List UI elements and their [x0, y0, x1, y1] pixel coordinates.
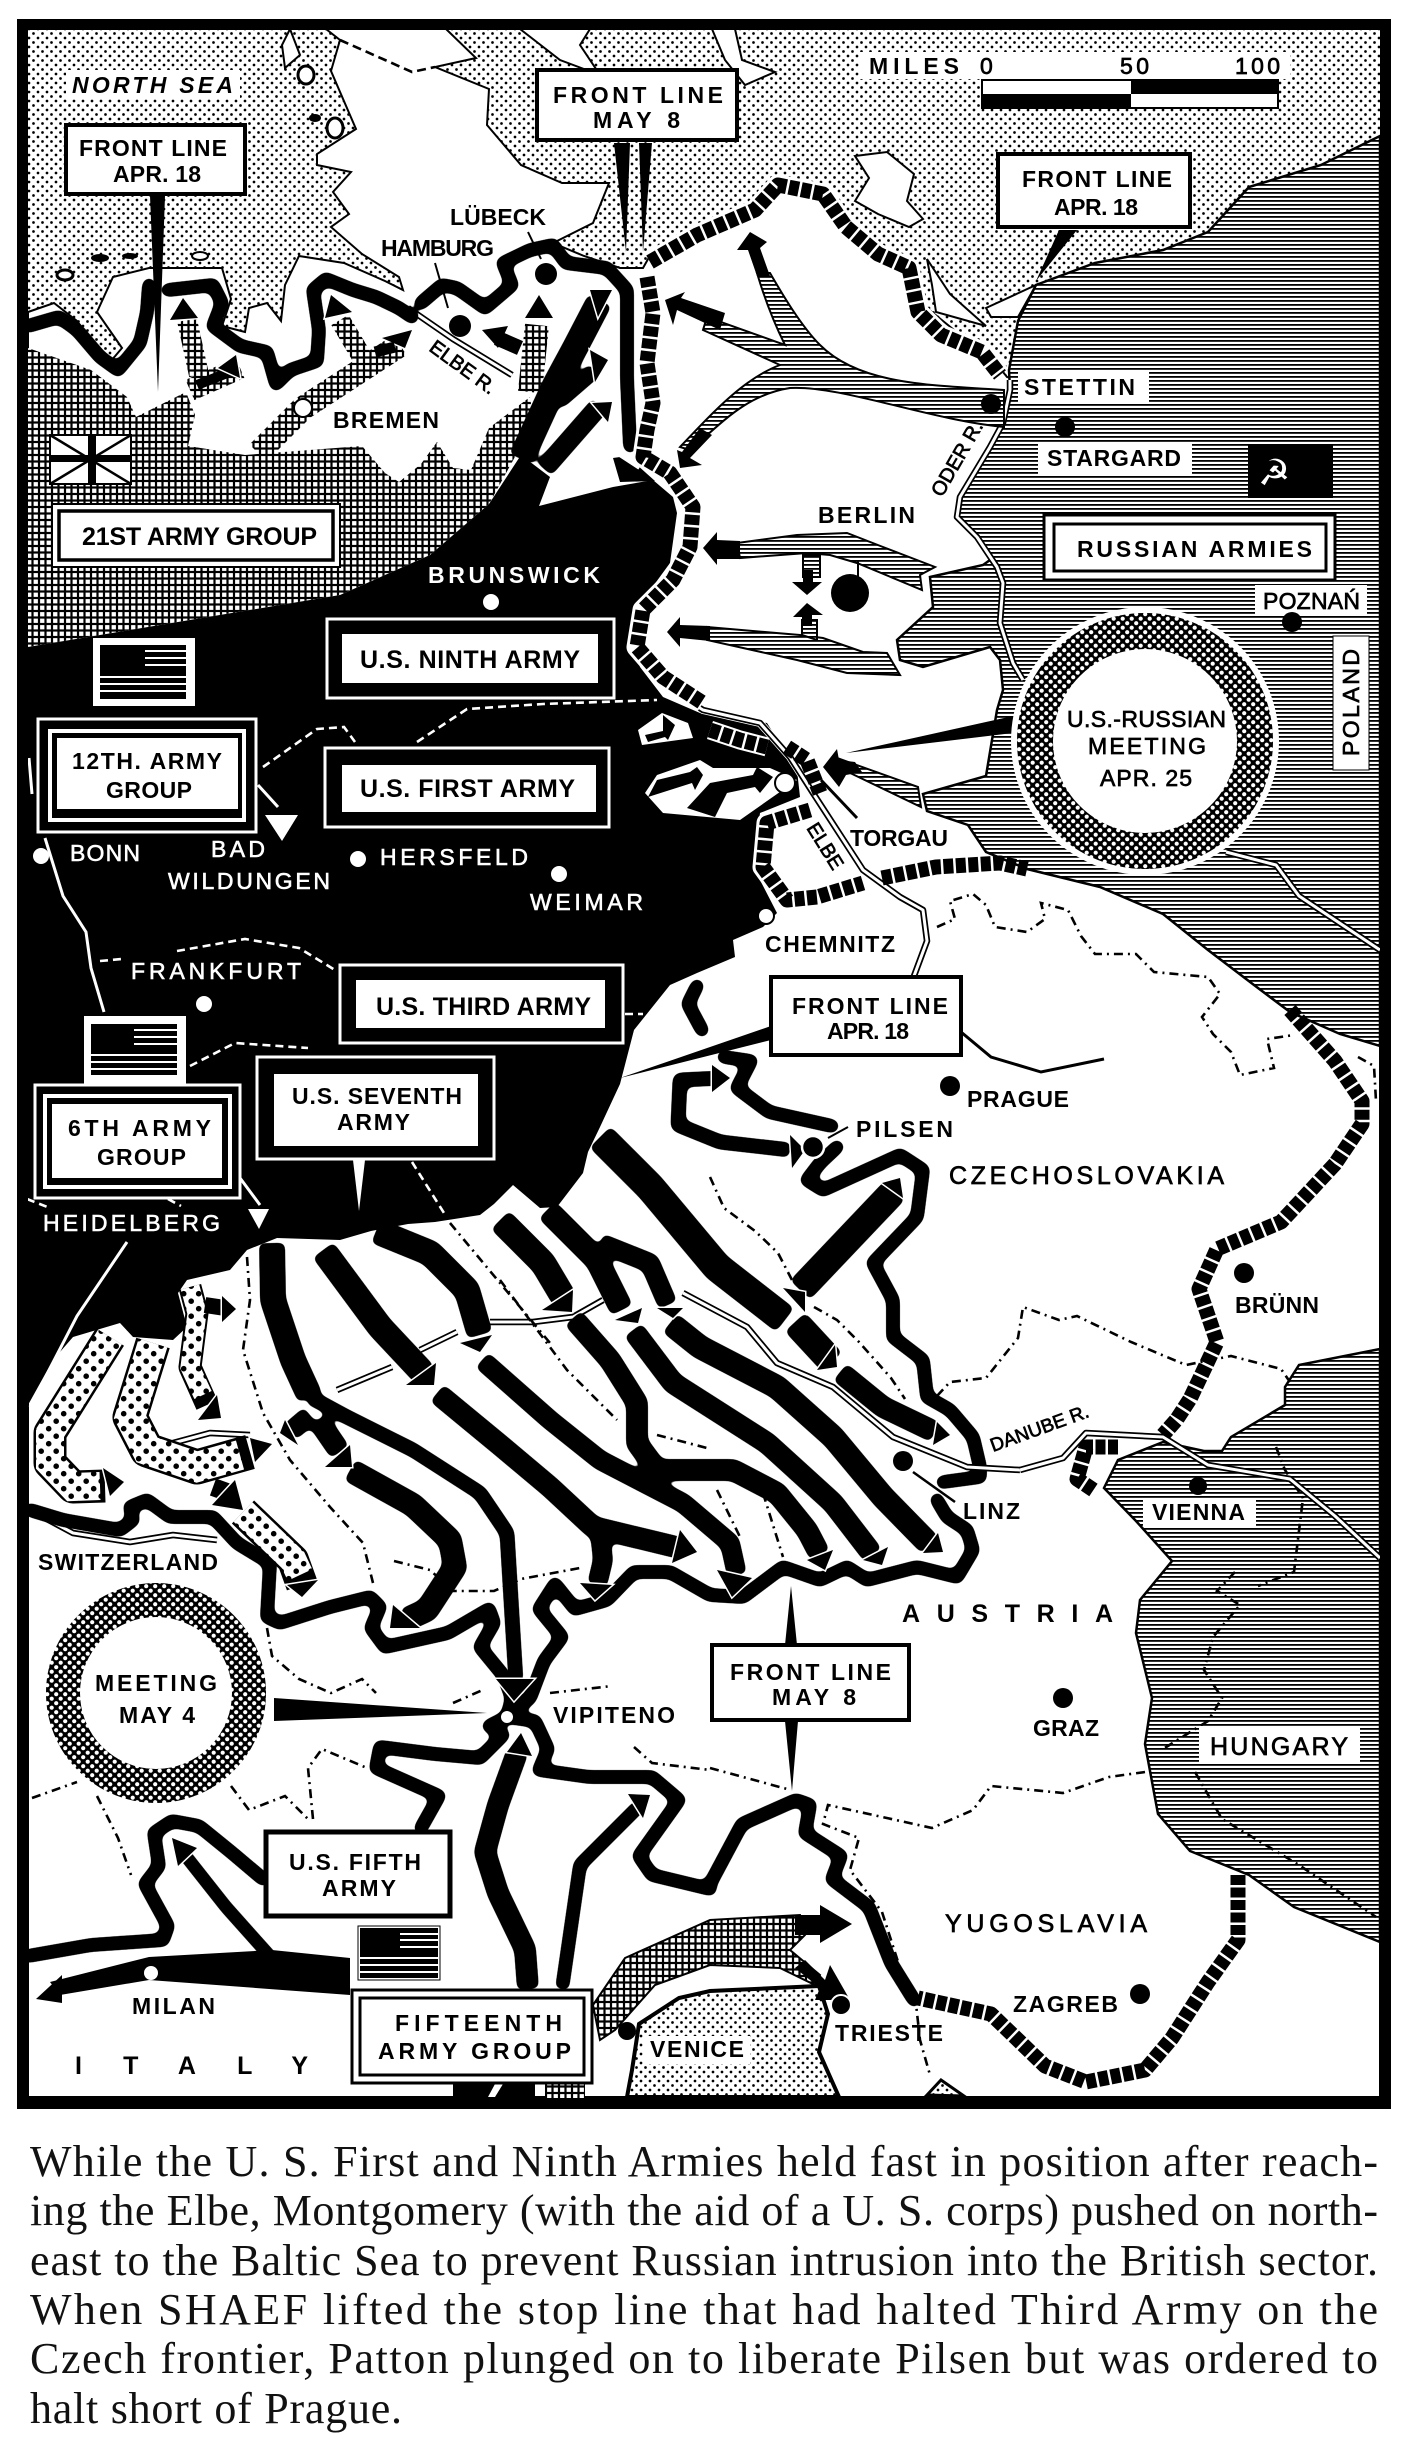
- box: U.S. Fifth Army: ARMY: [322, 1875, 396, 1901]
- callout: front line Apr 18, Baltic: FRONT LINE: [1022, 166, 1172, 192]
- arrows: Third and Seventh Army advances: [272, 1065, 950, 1701]
- label: North Sea: NORTH SEA: [72, 72, 233, 98]
- flag: Soviet Union: [1248, 445, 1333, 498]
- callout: front line Apr 18, central: FRONT LINE: [792, 993, 948, 1019]
- scale bar: miles: MILES: [869, 53, 959, 79]
- callout: front line May 8, south: FRONT LINE: [730, 1659, 891, 1685]
- labels: Austria, Graz, Hungary, Yugoslavia, Zagreb, Trieste: [831, 1600, 1360, 2046]
- labels: Austria, Graz, Hungary, Yugoslavia, Zagreb, Trieste: HUNGARY: [1210, 1733, 1348, 1761]
- callout: front line May 8, south: MAY 8: [772, 1684, 856, 1710]
- city labels: north Germany: LÜBECK: [450, 204, 546, 230]
- box: 6th Army Group: [35, 1085, 240, 1198]
- Russian dashed front line, Apr 18: [637, 185, 1362, 2082]
- box: U.S. Seventh Army: [257, 1057, 494, 1211]
- callout: front line May 8, north: MAY 8: [593, 107, 680, 133]
- box: 21st Army Group: 21ST ARMY GROUP: [82, 523, 317, 551]
- box: U.S. Fifth Army: [266, 1832, 450, 1916]
- label: Berlin: [818, 502, 915, 612]
- callout: front line May 8, north: FRONT LINE: [553, 82, 723, 108]
- flag: United States, Fifteenth Army Group: [358, 1926, 440, 1980]
- callout: front line Apr 18, west: [66, 125, 245, 392]
- label: Stargard: [1038, 417, 1192, 475]
- labels: Prague, Pilsen, Czechoslovakia, Brünn: CZECHOSLOVAKIA: [949, 1162, 1224, 1190]
- city labels: north Germany: [294, 204, 557, 433]
- label: Torgau and Elbe: ELBE: [802, 819, 848, 874]
- labels: Prague, Pilsen, Czechoslovakia, Brünn: PILSEN: [856, 1116, 953, 1142]
- label: Torgau and Elbe: TORGAU: [850, 825, 948, 851]
- city labels: central Germany in white: [33, 836, 643, 1236]
- caption text: east to the Baltic Sea to prevent Russian intrusion into the British sector.: [30, 2236, 1378, 2285]
- label: Stettin: [981, 372, 1149, 414]
- label: Venice: [618, 2022, 750, 2064]
- arrows: 6th Army Group stippled drives: [50, 1287, 318, 1597]
- bottom stub of arrows under Fifteenth Army Group: [453, 2083, 585, 2098]
- labels: Austria, Graz, Hungary, Yugoslavia, Zagreb, Trieste: ZAGREB: [1013, 1991, 1118, 2017]
- labels: Danube, Linz, Vienna: [893, 1402, 1380, 1558]
- label: Poznan: POZNAŃ: [1263, 588, 1360, 614]
- caption text: halt short of Prague.: [30, 2384, 402, 2433]
- scale bar: miles: 100: [1235, 53, 1280, 79]
- callout: front line May 8, north: [537, 70, 737, 252]
- callout: meeting May 4 circle: [63, 1600, 487, 1786]
- labels: Prague, Pilsen, Czechoslovakia, Brünn: BRÜNN: [1235, 1292, 1319, 1318]
- flag: Great Britain: [50, 435, 131, 484]
- callout: meeting May 4 circle: MAY 4: [119, 1702, 195, 1728]
- label: Berlin: BERLIN: [818, 502, 915, 528]
- labels: Austria, Graz, Hungary, Yugoslavia, Zagreb, Trieste: TRIESTE: [835, 2020, 943, 2046]
- scale bar: miles: 0: [980, 53, 993, 79]
- Russian zone hatching: [897, 136, 1380, 1942]
- callout: U.S.-Russian meeting circle: [1011, 607, 1279, 875]
- callout: front line Apr 18, west: APR. 18: [113, 161, 201, 187]
- label: Stargard: STARGARD: [1047, 445, 1181, 471]
- callout: front line May 8, south: [712, 1586, 909, 1791]
- box: Fifteenth Army Group: ARMY GROUP: [378, 2038, 571, 2064]
- scale bar: miles: 50: [1120, 53, 1149, 79]
- arrows: Russian advance through hatched bands: [665, 232, 1013, 818]
- labels: Prague, Pilsen, Czechoslovakia, Brünn: [802, 1076, 1319, 1318]
- box: Fifteenth Army Group: [352, 1990, 592, 2083]
- city labels: central Germany in white: BAD: [211, 836, 265, 862]
- box: U.S. Ninth Army: U.S. NINTH ARMY: [360, 646, 580, 674]
- box: 6th Army Group: 6TH ARMY: [68, 1115, 211, 1141]
- city labels: central Germany in white: HERSFELD: [380, 844, 528, 870]
- labels: Milan and Italy: ITALY: [75, 2052, 308, 2080]
- river overlays at the fronts: [683, 1293, 1020, 1470]
- American zone black mass: [28, 455, 800, 1405]
- box: U.S. Third Army: U.S. THIRD ARMY: [376, 993, 591, 1021]
- city labels: north Germany: HAMBURG: [381, 235, 494, 261]
- labels: Prague, Pilsen, Czechoslovakia, Brünn: PRAGUE: [967, 1086, 1069, 1112]
- arrows: drive to Baltic near Luebeck: [521, 290, 612, 469]
- solid front line, May 8: [28, 245, 980, 2000]
- arrows: crosshatched drive to Trieste: [593, 1905, 852, 2040]
- caption text: ing the Elbe, Montgomery (with the aid of a U. S. corps) pushed on north-: [30, 2186, 1378, 2235]
- labels: Danube, Linz, Vienna: LINZ: [963, 1498, 1020, 1524]
- label: Chemnitz: CHEMNITZ: [765, 931, 895, 957]
- label: Poland: POLAND: [1338, 649, 1364, 756]
- city labels: central Germany in white: WEIMAR: [530, 889, 643, 915]
- arrows: Fifth Army and Fifteenth Army Group: [36, 1733, 650, 2003]
- city labels: central Germany in white: WILDUNGEN: [168, 868, 330, 894]
- caption text: [30, 2137, 1378, 2433]
- box: 12th Army Group: [38, 719, 256, 832]
- labels: Austria, Graz, Hungary, Yugoslavia, Zagreb, Trieste: GRAZ: [1033, 1715, 1099, 1741]
- label: Brunswick: BRUNSWICK: [428, 562, 600, 588]
- rivers: Elbe, Oder, Danube, Rhine and others: [29, 308, 1380, 1542]
- label: Poznan: [1255, 585, 1367, 632]
- box: U.S. First Army: [325, 748, 609, 827]
- label: Venice: VENICE: [650, 2036, 744, 2062]
- box: U.S. Third Army: [340, 965, 623, 1043]
- callout: front line Apr 18, central: [620, 977, 1104, 1078]
- city labels: north Germany: ELBE R.: [425, 336, 500, 399]
- city labels: central Germany in white: HEIDELBERG: [43, 1210, 220, 1236]
- marker: Heidelberg headquarters triangle: [240, 1178, 269, 1229]
- box: 12th Army Group: GROUP: [106, 777, 192, 803]
- city labels: north Germany: BREMEN: [333, 407, 439, 433]
- label: Poland: [1333, 636, 1369, 770]
- caption text: When SHAEF lifted the stop line that had halted Third Army on the: [30, 2285, 1378, 2334]
- flag: United States, 6th Army Group: [84, 1016, 186, 1084]
- caption text: While the U. S. First and Ninth Armies held fast in position after reach-: [30, 2137, 1378, 2186]
- box: 6th Army Group: GROUP: [97, 1144, 186, 1170]
- callout: front line Apr 18, west: FRONT LINE: [79, 135, 227, 161]
- city labels: central Germany in white: BONN: [70, 840, 140, 866]
- city labels: central Germany in white: FRANKFURT: [131, 958, 301, 984]
- callout: front line Apr 18, central: APR. 18: [827, 1018, 909, 1044]
- box: U.S. First Army: U.S. FIRST ARMY: [360, 775, 575, 803]
- callout: U.S.-Russian meeting circle: U.S.-RUSSIAN: [1067, 706, 1226, 732]
- white dashed boundaries on black: [27, 700, 657, 1213]
- Venetian Adriatic stipple: [627, 1986, 964, 2097]
- labels: Austria, Graz, Hungary, Yugoslavia, Zagreb, Trieste: AUSTRIA: [902, 1600, 1113, 1628]
- Elbe bridgehead lobes: [613, 456, 797, 820]
- box: Fifteenth Army Group: FIFTEENTH: [395, 2010, 562, 2036]
- labels: Milan and Italy: MILAN: [132, 1993, 215, 2019]
- box: 12th Army Group: 12TH. ARMY: [72, 748, 222, 774]
- label: Chemnitz: [758, 908, 895, 957]
- label: Stettin: STETTIN: [1024, 374, 1135, 400]
- marker: Bad Wildungen headquarters triangle: [258, 785, 298, 841]
- label: Oder River: ODER R.: [927, 417, 988, 500]
- flag: Soviet Union: ☭: [1258, 453, 1290, 494]
- flag: United States, 12th Army Group: [93, 638, 195, 706]
- British 21st Army Group zone crosshatch: [28, 348, 534, 647]
- label: Vipiteno: [500, 1702, 675, 1728]
- label: Brunswick: [428, 562, 600, 610]
- box: 21st Army Group: [52, 504, 340, 567]
- callout: U.S.-Russian meeting circle: APR. 25: [1100, 765, 1192, 791]
- labels: Danube, Linz, Vienna: DANUBE R.: [988, 1402, 1092, 1457]
- labels: Milan and Italy: [75, 1966, 308, 2080]
- label: Switzerland: SWITZERLAND: [38, 1549, 218, 1575]
- callout: U.S.-Russian meeting circle: MEETING: [1088, 733, 1206, 759]
- box: U.S. Seventh Army: U.S. SEVENTH: [292, 1083, 462, 1109]
- callout: front line Apr 18, Baltic: APR. 18: [1054, 194, 1138, 220]
- scale bar: miles: [869, 53, 1280, 108]
- box: U.S. Seventh Army: ARMY: [337, 1109, 410, 1135]
- box: Russian Armies: [1044, 515, 1335, 580]
- label: Vipiteno: VIPITENO: [553, 1702, 675, 1728]
- arrows: 21st Army Group crosshatched drives: [170, 295, 553, 453]
- caption text: Czech frontier, Patton plunged on to liberate Pilsen but was ordered to: [30, 2334, 1378, 2383]
- box: U.S. Fifth Army: U.S. FIFTH: [289, 1849, 421, 1875]
- black dashed boundaries on land: [32, 894, 1376, 2075]
- box: U.S. Ninth Army: [327, 619, 614, 698]
- label: Torgau and Elbe: [775, 773, 948, 874]
- labels: Austria, Graz, Hungary, Yugoslavia, Zagreb, Trieste: YUGOSLAVIA: [945, 1910, 1147, 1938]
- labels: Danube, Linz, Vienna: VIENNA: [1152, 1499, 1245, 1525]
- callout: meeting May 4 circle: MEETING: [95, 1670, 217, 1696]
- callout: front line Apr 18, Baltic: [998, 154, 1190, 281]
- box: Russian Armies: RUSSIAN ARMIES: [1077, 536, 1312, 562]
